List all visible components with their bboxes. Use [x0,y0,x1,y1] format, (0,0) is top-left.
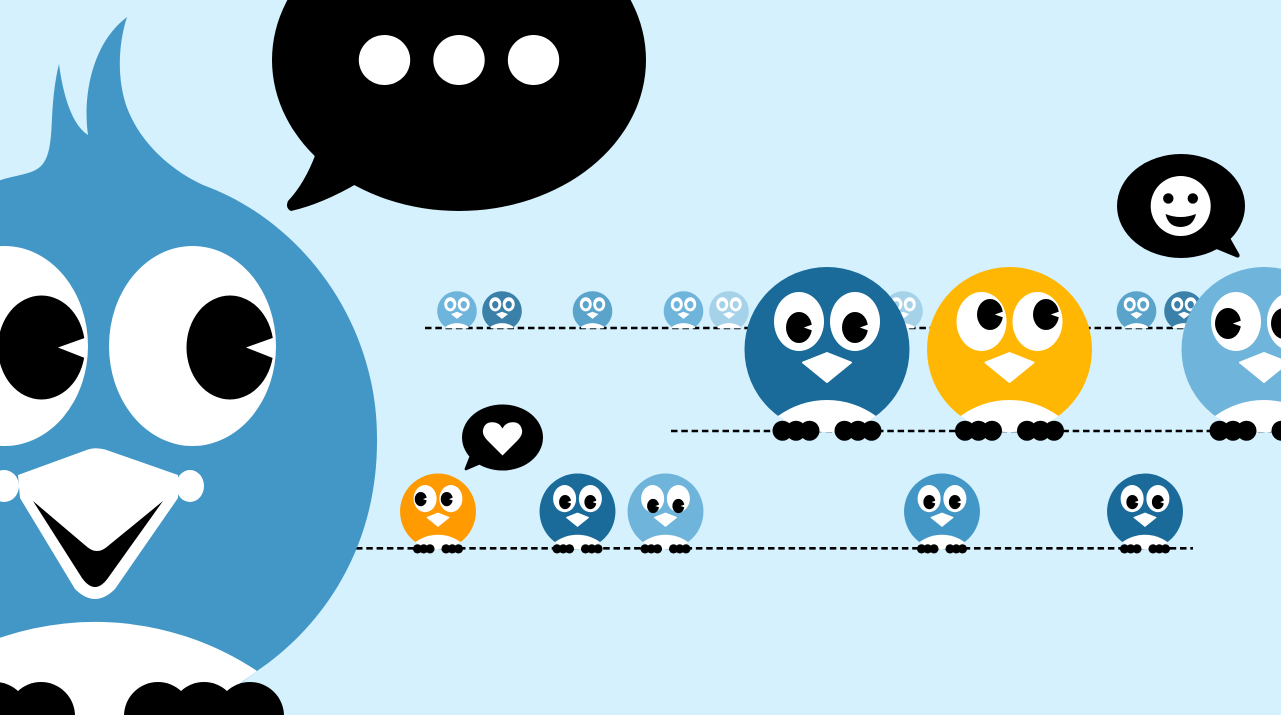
wire: middle [671,430,1281,432]
giant blue bird [0,17,377,715]
giant bird body with crest [0,17,377,715]
medium orange bird [400,474,476,553]
medium dark blue bird right [1107,474,1183,553]
giant bird left eye [0,246,88,446]
typing dot 2 [433,35,485,85]
giant bird right eye [109,246,276,446]
small bird 6 [883,291,923,328]
wire: top [425,327,1192,329]
giant bird right foot [124,682,284,715]
small bird 3 [573,291,612,328]
medium mid blue bird [904,474,980,553]
icon: smiley face [1151,176,1211,236]
small bird 7 [1117,291,1156,328]
small bird 8 [1164,291,1204,328]
small bird 4 [664,291,703,328]
large light blue bird [1182,267,1281,441]
typing dot 3 [508,35,559,85]
speech bubble: typing dots [272,0,646,211]
medium light blue bird [628,474,703,553]
giant bird belly [0,622,257,715]
small bird 1 [437,291,477,328]
large yellow bird [927,267,1092,441]
giant bird left foot [0,682,75,715]
small bird 5 [709,291,749,328]
speech bubble: heart [462,404,543,470]
icon: heart [483,422,522,456]
giant bird beak [0,448,204,599]
small bird 2 [482,291,522,328]
medium dark blue bird [540,474,615,553]
open mouth [33,501,163,587]
large dark blue bird [744,267,910,441]
typing dot 1 [359,35,410,85]
small birds on the top wire [437,291,1204,328]
speech bubble: smiley [1117,154,1245,258]
wire: bottom [356,547,1193,550]
